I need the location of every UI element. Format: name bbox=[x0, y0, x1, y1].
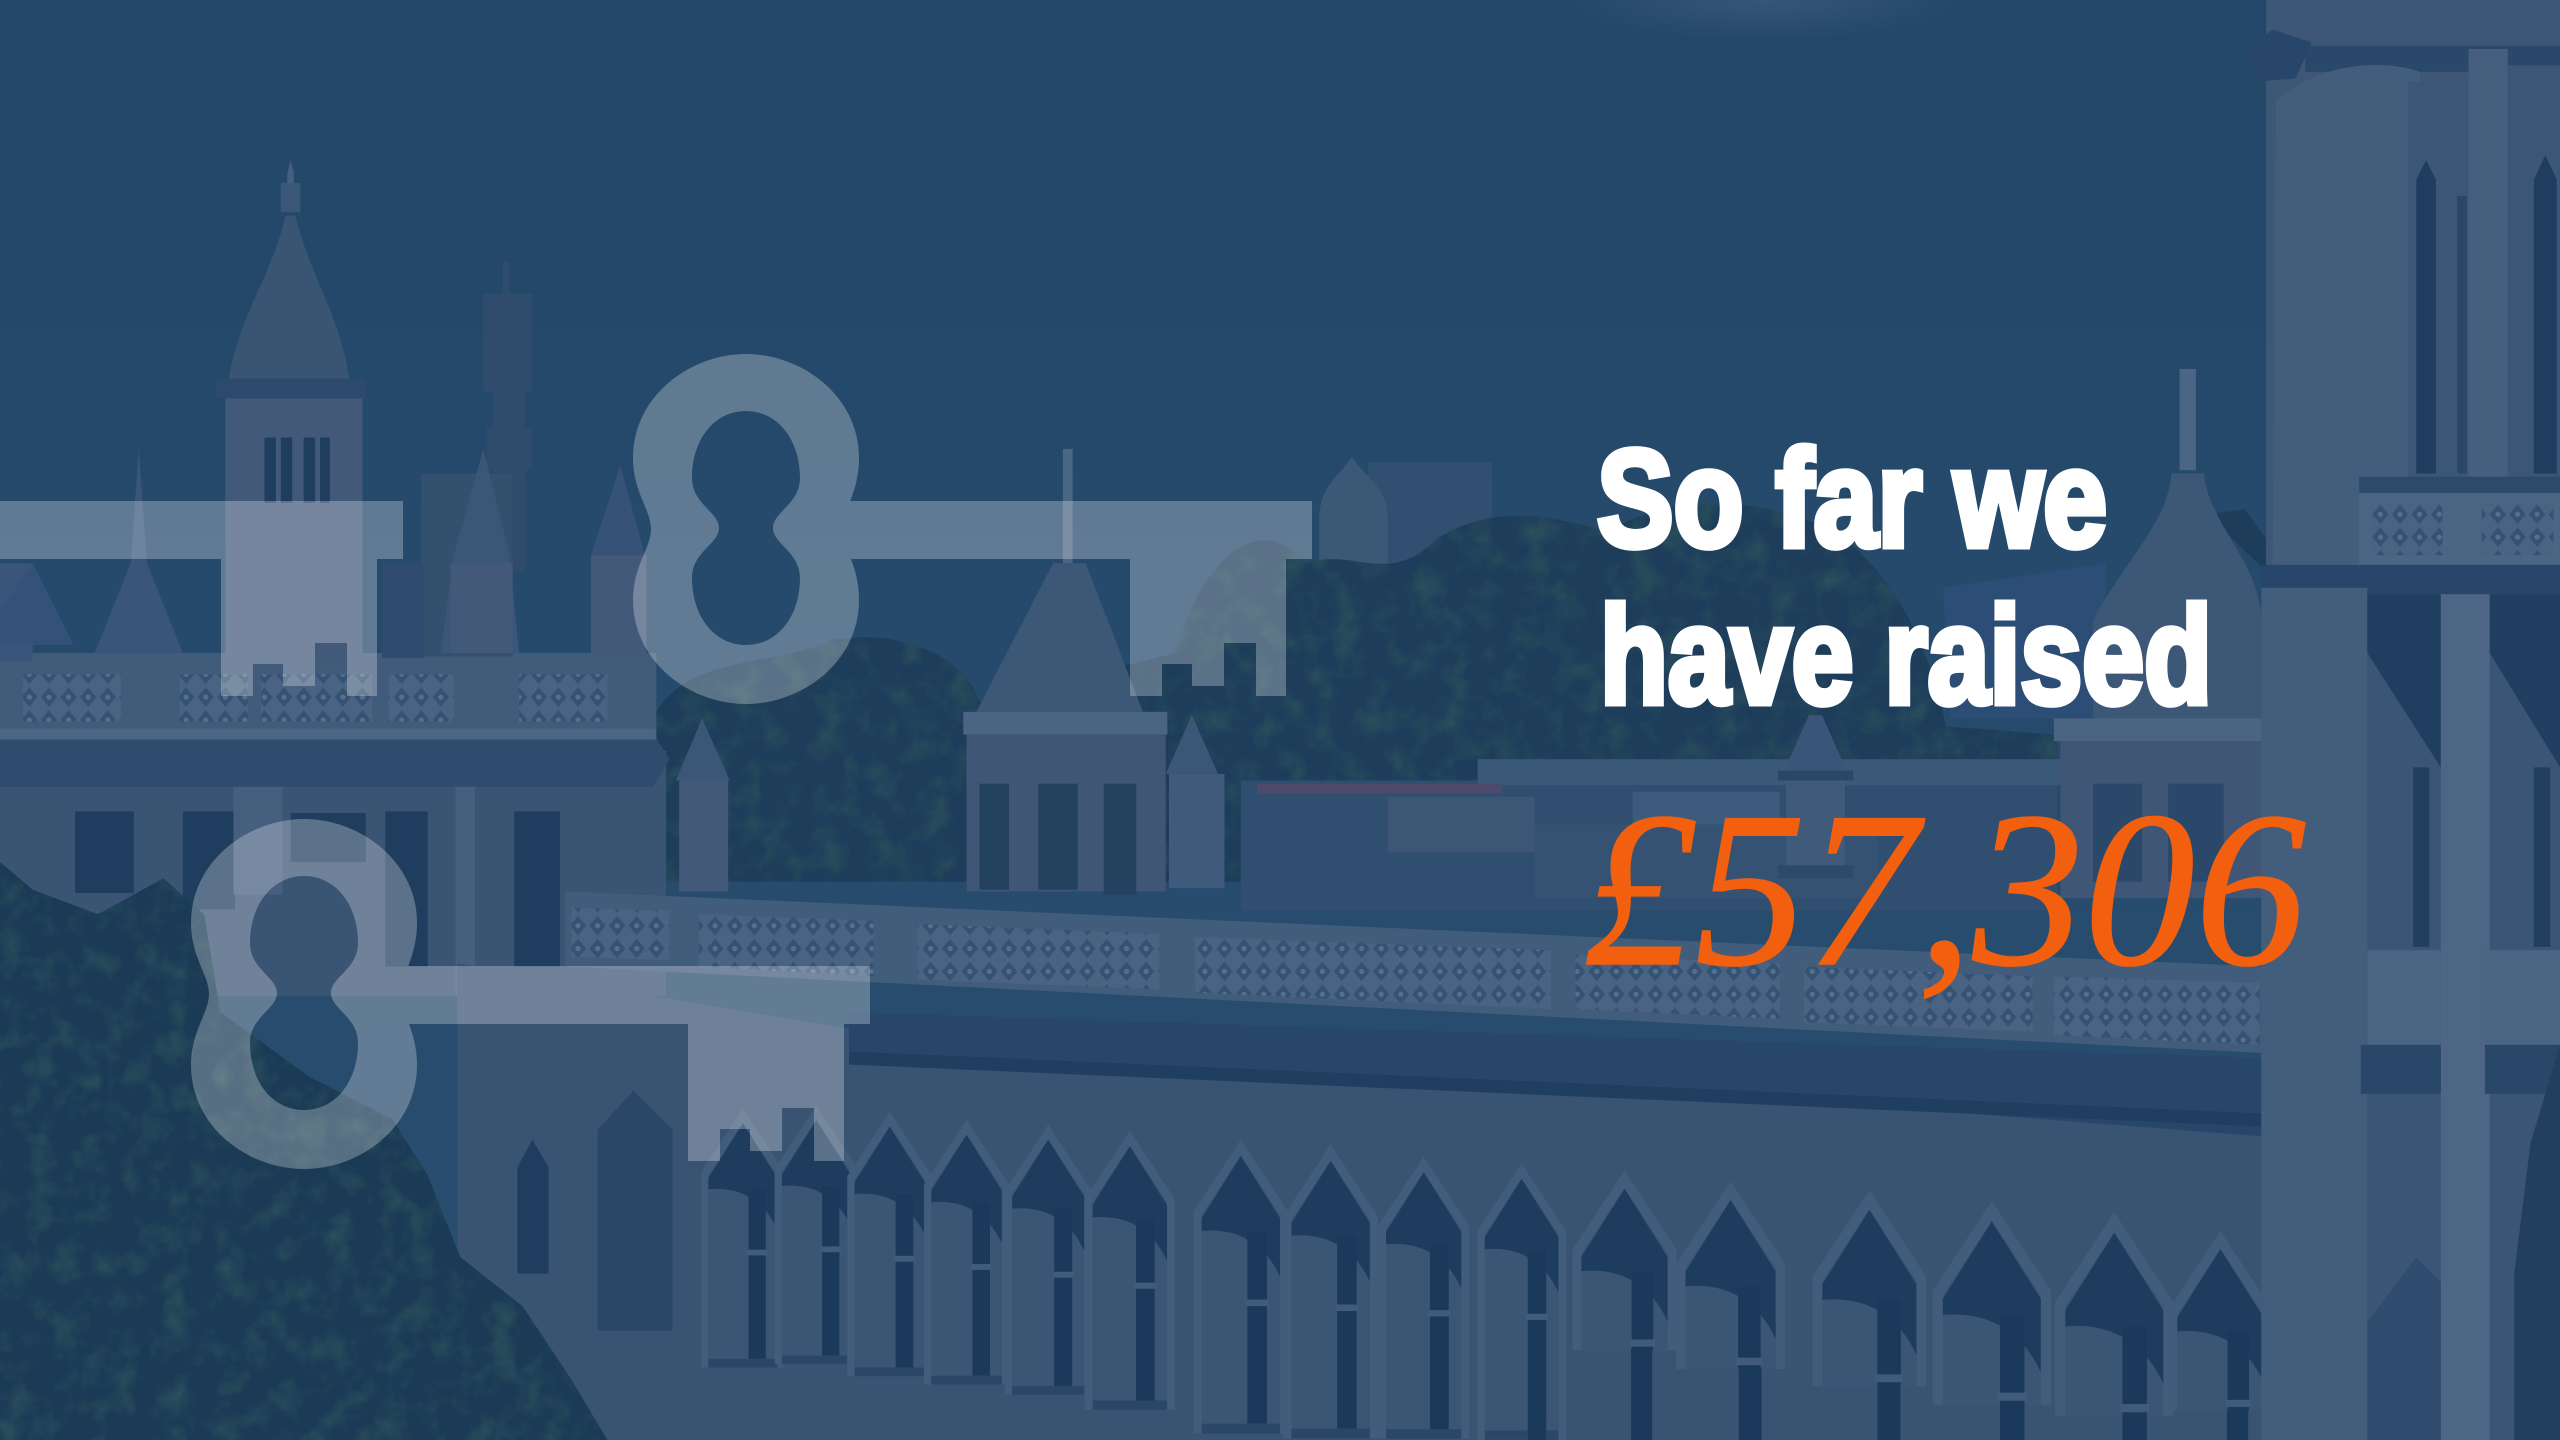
foreground tree bbox=[0, 862, 607, 1440]
left building cornice bbox=[0, 728, 669, 787]
mid-ground rooftops bbox=[1241, 759, 2065, 911]
window slits reaching the bottom edge bbox=[1528, 1349, 2248, 1440]
heading: so far we have raised bbox=[1597, 422, 2212, 733]
distant telecom tower bbox=[483, 261, 532, 571]
amount raised: £57,306 bbox=[1584, 767, 2306, 1013]
key: lower-left key bbox=[191, 819, 870, 1169]
key: upper centre key bbox=[633, 354, 1312, 704]
small blue roof behind right tower bbox=[1943, 563, 2106, 718]
cloud patch bbox=[1551, 0, 1976, 42]
main wall cornice bbox=[849, 1012, 2263, 1136]
heading: so far we have raised: So far we bbox=[1597, 422, 2107, 576]
left building balustrade bbox=[0, 653, 656, 728]
main wall balustrade bbox=[565, 891, 2263, 1053]
key: top-left partial key bbox=[0, 501, 403, 696]
distant dome bbox=[1319, 457, 1388, 604]
large arched recess bbox=[598, 1091, 673, 1331]
cornice highlight bbox=[0, 728, 656, 740]
mid-ground trees bbox=[653, 504, 2057, 882]
domed clock tower bbox=[216, 160, 366, 660]
distant office block bbox=[1368, 462, 1492, 609]
cornice highlight bbox=[849, 1051, 2263, 1127]
tree behind right tower bbox=[2207, 509, 2266, 571]
main wall bbox=[457, 963, 2263, 1440]
left turret group bbox=[0, 449, 647, 661]
right foreground tower bbox=[2240, 0, 2560, 1440]
small arched window on left wall bbox=[518, 1140, 549, 1273]
right tower with spire bbox=[2054, 369, 2263, 898]
left building pilasters bbox=[233, 780, 475, 996]
heading: so far we have raised: have raised bbox=[1600, 579, 2212, 733]
centre tower with spire bbox=[676, 449, 1224, 895]
small roof turret bbox=[1778, 715, 1853, 878]
arched windows row bbox=[701, 1106, 2272, 1440]
left building windows bbox=[75, 811, 560, 967]
left building upper wall bbox=[0, 751, 666, 996]
